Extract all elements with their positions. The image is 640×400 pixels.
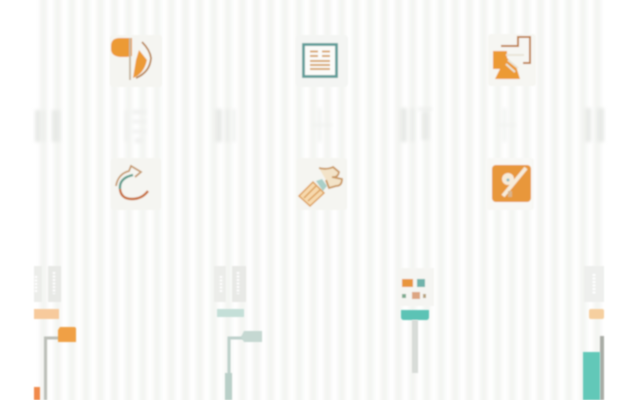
icon: circular arrow tile (111, 158, 161, 210)
icon: tool and pencil tile (297, 158, 347, 210)
label: blurred captions row 2 (34, 266, 604, 302)
tile: colored squares (398, 268, 434, 306)
icon: ear and speech tile (110, 35, 162, 87)
icon: orange crossed tile (486, 158, 534, 210)
icon: document frame tile (296, 35, 348, 87)
label: blurred captions row 1 (35, 108, 604, 143)
icon: hand and panel tile (488, 34, 536, 86)
markers (34, 327, 600, 400)
connector lines (46, 320, 604, 400)
label bars (34, 309, 604, 320)
